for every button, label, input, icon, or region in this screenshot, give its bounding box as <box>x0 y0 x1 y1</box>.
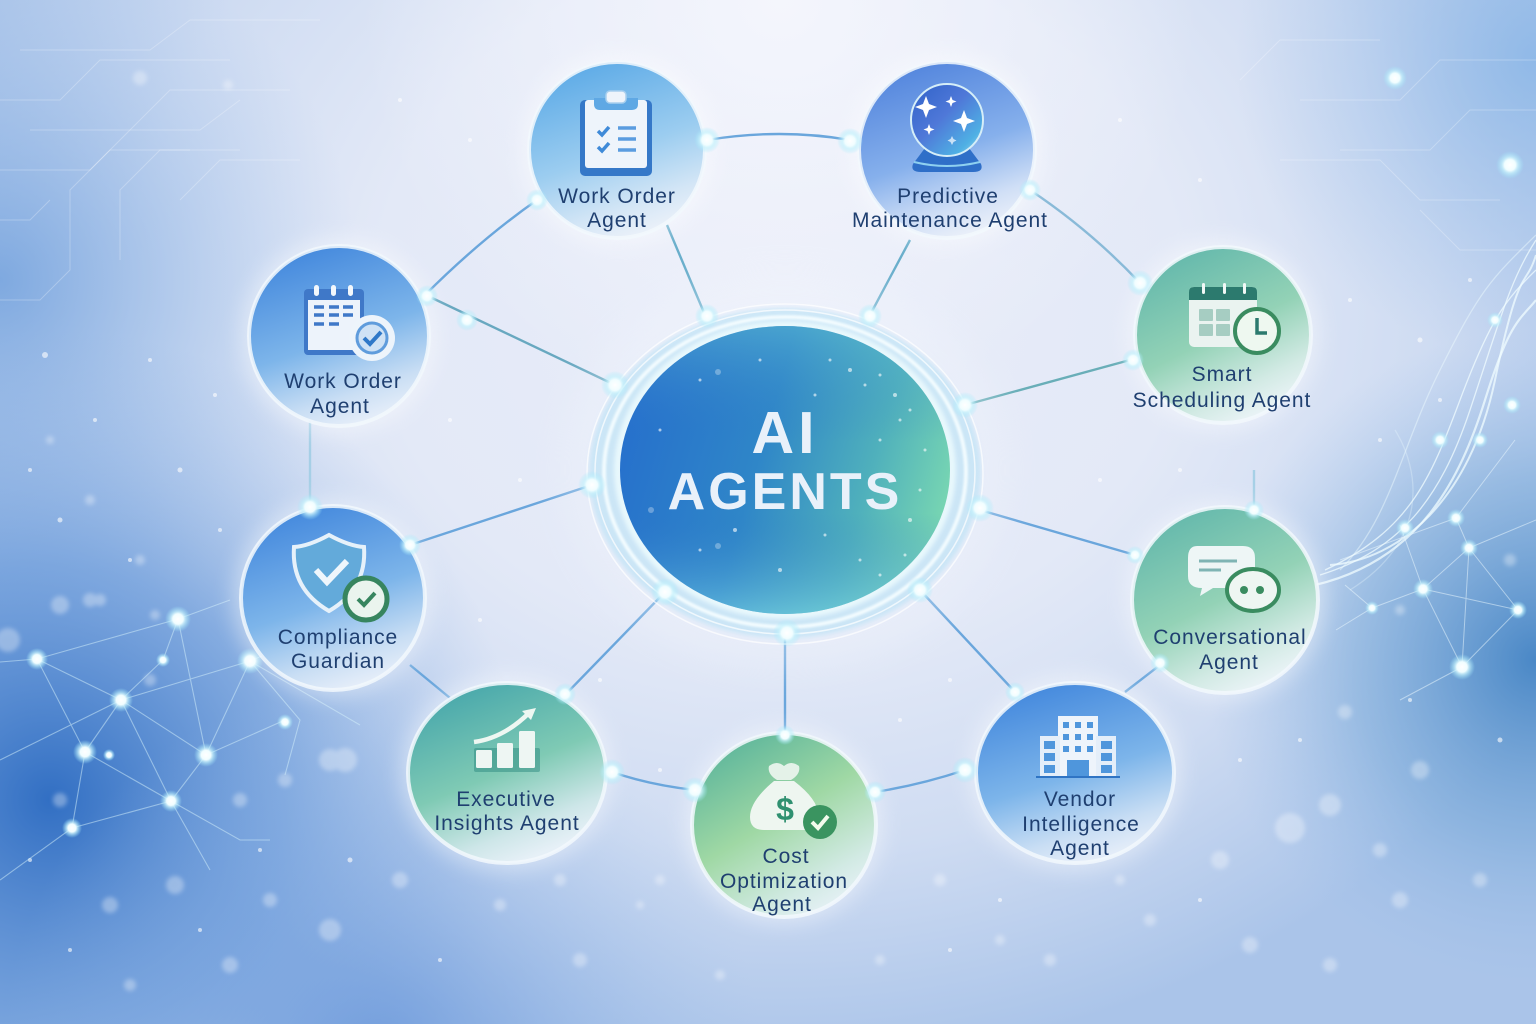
node: Work Order Agent (top): Agent <box>587 209 647 232</box>
node: Cost Optimization Agent: Cost <box>763 845 809 868</box>
node: Work Order Agent (left) <box>241 238 437 434</box>
node: Conversational Agent <box>1125 500 1325 700</box>
network: lower left <box>0 600 360 880</box>
node: Predictive Maintenance Agent <box>851 54 1048 246</box>
icon: shield with check <box>294 535 387 620</box>
connector glow points <box>297 127 1264 803</box>
node: Executive Insights Agent: Insights Agent <box>434 812 580 835</box>
icon: calendar with check <box>304 285 395 361</box>
node: Executive Insights Agent: Executive <box>456 788 556 811</box>
central hub: AI Agents: AI <box>752 400 818 466</box>
icon: chat bubbles <box>1188 546 1279 611</box>
icon: crystal ball <box>911 84 983 172</box>
node: Conversational Agent: Conversational <box>1153 626 1307 649</box>
node: Compliance Guardian: Guardian <box>291 650 385 673</box>
circuit pattern: top left <box>0 20 320 300</box>
icon: money bag with check <box>750 763 837 839</box>
node: Work Order Agent (top) <box>521 54 713 246</box>
icon: rising bar chart <box>474 708 540 772</box>
node: Work Order Agent (left): Agent <box>310 395 370 418</box>
node: Work Order Agent (top): Work Order <box>558 185 676 208</box>
node: Executive Insights Agent <box>401 675 613 871</box>
node: Work Order Agent (left): Work Order <box>284 370 402 393</box>
node: Conversational Agent: Agent <box>1199 651 1259 674</box>
node: Cost Optimization Agent <box>685 726 883 924</box>
node: Compliance Guardian: Compliance <box>278 626 398 649</box>
icon: calendar and clock <box>1189 283 1279 353</box>
node: Vendor Intelligence Agent: Vendor <box>1044 788 1116 811</box>
circuit pattern: top right <box>1240 40 1536 250</box>
node: Vendor Intelligence Agent: Agent <box>1050 837 1110 860</box>
node: Predictive Maintenance Agent: Maintenance Agent <box>852 209 1048 232</box>
node: Cost Optimization Agent: Agent <box>752 893 812 916</box>
icon: office building <box>1036 716 1120 778</box>
node: Smart Scheduling Agent: Smart <box>1192 363 1252 386</box>
network: right wave <box>1315 66 1536 700</box>
node: Smart Scheduling Agent <box>1127 239 1319 431</box>
icon: money bag with check: $ <box>776 791 794 827</box>
node: Compliance Guardian <box>233 498 433 698</box>
node: Vendor Intelligence Agent: Intelligence <box>1022 813 1140 836</box>
node: Smart Scheduling Agent: Scheduling Agent <box>1133 389 1311 412</box>
node: Predictive Maintenance Agent: Predictive <box>897 185 999 208</box>
icon: clipboard checklist <box>580 91 652 176</box>
connector lines <box>310 134 1254 792</box>
node: Cost Optimization Agent: Optimization <box>720 870 848 893</box>
node: Vendor Intelligence Agent <box>969 675 1181 871</box>
central hub: AI Agents: AGENTS <box>668 463 902 521</box>
central hub: AI Agents <box>560 270 1010 670</box>
